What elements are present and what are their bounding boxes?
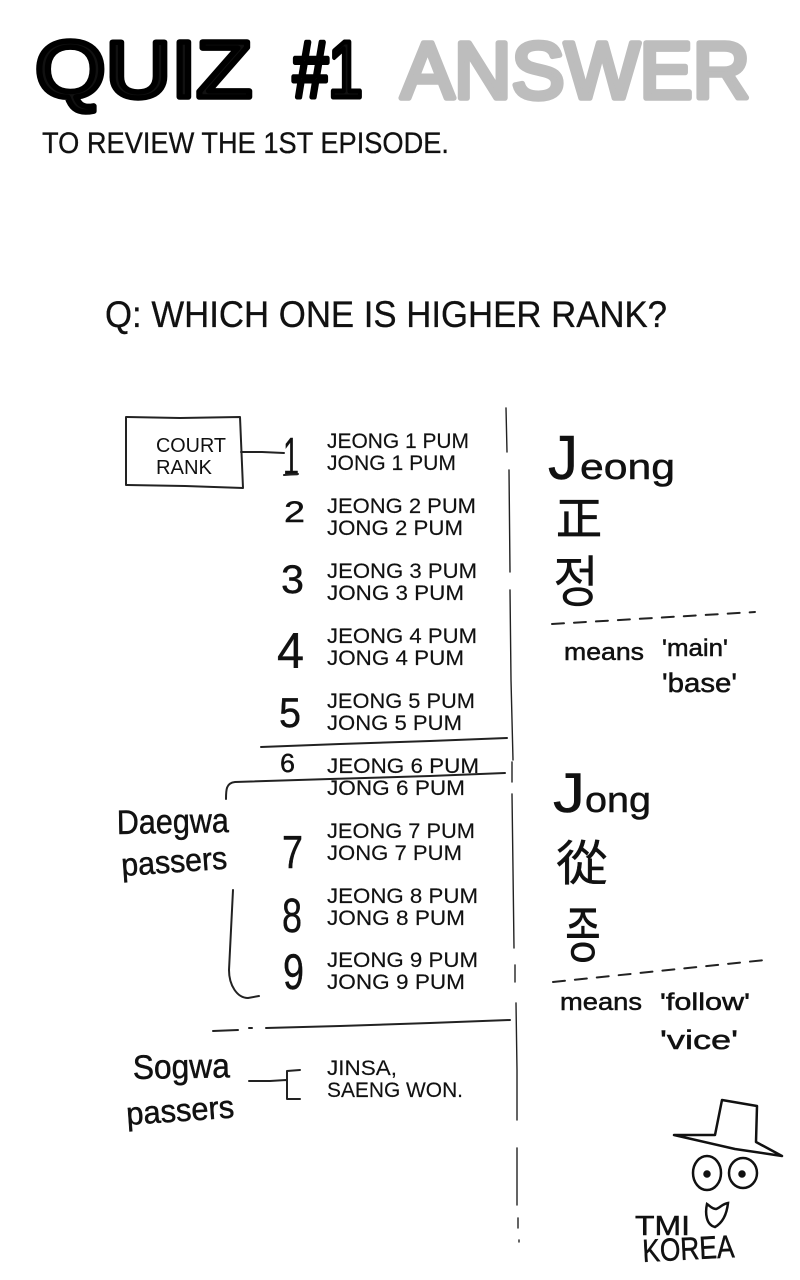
- rank list: JEONG 8 PUM: [327, 885, 478, 908]
- rank numerals: 4: [277, 623, 304, 679]
- icon: eyes: [693, 1156, 757, 1190]
- rank list: JONG 3 PUM: [327, 582, 464, 605]
- Jong panel: 從: [556, 824, 608, 894]
- Sogwa label: passers: [125, 1089, 235, 1132]
- rank list: JONG 9 PUM: [327, 971, 465, 994]
- Jong panel: means: [560, 989, 642, 1016]
- rank numerals: 5: [279, 689, 301, 736]
- Jeong panel: 'base': [662, 668, 737, 698]
- Daegwa bracket: [226, 773, 505, 998]
- rank list: [327, 430, 479, 1102]
- Daegwa label: Daegwa: [116, 802, 229, 842]
- question heading: Q: WHICH ONE IS HIGHER RANK?: [105, 294, 667, 335]
- icon: heart mouth: [706, 1203, 728, 1227]
- Jong panel: [553, 761, 765, 1055]
- rank list: JEONG 6 PUM: [327, 755, 479, 778]
- rank numerals: 2: [284, 496, 305, 529]
- court rank box: RANK: [156, 457, 213, 479]
- rank numerals: 6: [280, 748, 295, 778]
- TMI Korea signature: TMI: [635, 1210, 690, 1241]
- rank numerals: 7: [282, 826, 303, 878]
- Jeong panel: means: [564, 639, 644, 666]
- Daegwa label: [116, 802, 229, 883]
- rank numerals: 1: [283, 427, 299, 487]
- vertical divider: [506, 408, 519, 1242]
- rank list: JONG 2 PUM: [327, 517, 463, 540]
- title: #1: [293, 25, 363, 114]
- Jeong panel: [548, 424, 755, 698]
- rank list: JEONG 4 PUM: [327, 625, 477, 648]
- rank numerals: [277, 427, 305, 1000]
- Jong panel: J: [553, 761, 585, 824]
- title: [35, 25, 750, 115]
- Jeong panel: J: [548, 424, 578, 493]
- court rank box: COURT: [156, 435, 226, 457]
- Jeong panel: 'main': [662, 635, 728, 662]
- rank numerals: 8: [282, 890, 302, 943]
- TMI Korea signature: KOREA: [641, 1228, 736, 1269]
- rank list: JEONG 5 PUM: [327, 690, 475, 713]
- rank list: JONG 6 PUM: [327, 777, 465, 800]
- connector: court rank to 1: [241, 452, 284, 453]
- rank numerals: 9: [283, 944, 304, 1000]
- rank 5/6 dividing line: [261, 738, 507, 747]
- rank list: JEONG 7 PUM: [327, 820, 475, 843]
- subtitle: TO REVIEW THE 1ST EPISODE.: [42, 127, 449, 160]
- Daegwa label: passers: [120, 840, 228, 883]
- rank list: JONG 5 PUM: [327, 712, 462, 735]
- rank list: JONG 1 PUM: [327, 452, 456, 475]
- rank list: JONG 7 PUM: [327, 842, 462, 865]
- Jeong panel: 正: [556, 483, 602, 547]
- Jong panel: 'follow': [660, 989, 750, 1016]
- rank list: JONG 8 PUM: [327, 907, 465, 930]
- court rank box: [126, 417, 243, 488]
- Jong panel: ong: [585, 779, 651, 820]
- icon: hat: [674, 1100, 782, 1156]
- rank list: SAENG WON.: [327, 1079, 463, 1102]
- title: QUIZ: [35, 25, 252, 114]
- Jong panel: 종: [565, 885, 601, 975]
- Sogwa divider line: [213, 1020, 510, 1031]
- title: ANSWER: [401, 26, 750, 115]
- Sogwa bracket: [249, 1070, 300, 1099]
- rank list: JEONG 9 PUM: [327, 949, 478, 972]
- rank list: JONG 4 PUM: [327, 647, 464, 670]
- rank list: JEONG 1 PUM: [327, 430, 469, 453]
- rank list: JEONG 2 PUM: [327, 495, 476, 518]
- TMI Korea signature: [635, 1210, 736, 1269]
- Sogwa label: Sogwa: [132, 1047, 230, 1087]
- rank list: JINSA,: [327, 1057, 397, 1080]
- Jeong panel: eong: [580, 446, 675, 487]
- rank list: JEONG 3 PUM: [327, 560, 477, 583]
- Jong panel: 'vice': [660, 1025, 738, 1055]
- Sogwa label: [125, 1047, 235, 1132]
- Jeong panel: 정: [553, 538, 599, 619]
- rank numerals: 3: [281, 558, 304, 602]
